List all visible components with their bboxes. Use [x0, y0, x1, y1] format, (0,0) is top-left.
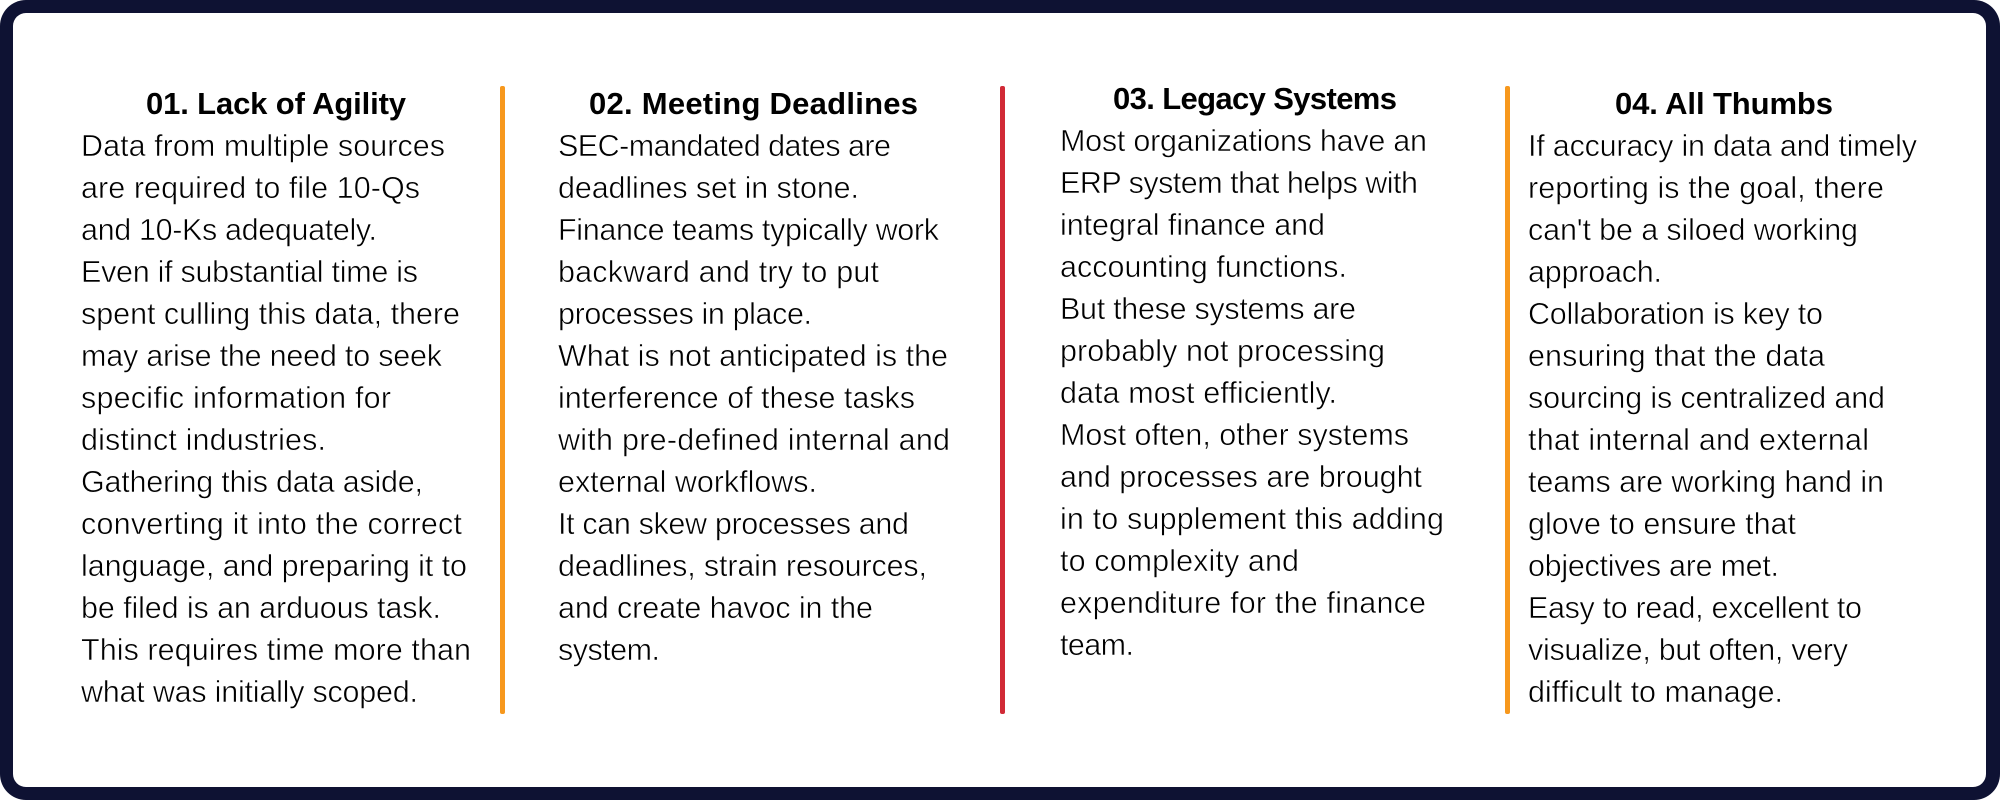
- divider: red: [1000, 86, 1005, 714]
- body text: 04: glove to ensure that: [1528, 507, 1797, 541]
- body text: 03: Most organizations have an: [1060, 124, 1427, 158]
- body text: 01: Gathering this data aside,: [81, 465, 423, 499]
- body text: 04: difficult to manage.: [1528, 675, 1783, 709]
- body text: 03: in to supplement this adding: [1060, 502, 1444, 536]
- body text: 02: deadlines, strain resources,: [558, 549, 927, 583]
- panel: 04 All Thumbs: [1528, 86, 1918, 709]
- body text: 01: be filed is an arduous task.: [81, 591, 441, 625]
- body text: 03: ERP system that helps with: [1060, 166, 1418, 200]
- panel: 01 Lack of Agility: [80, 86, 471, 709]
- body text: 02: system.: [558, 633, 660, 667]
- body text: 04: [1528, 129, 1918, 709]
- heading: 04: 04. All Thumbs: [1615, 86, 1833, 121]
- divider: orange 2: [1505, 86, 1510, 714]
- body text: 01: converting it into the correct: [81, 507, 463, 541]
- body text: 03: expenditure for the finance: [1060, 586, 1426, 620]
- body text: 03: But these systems are: [1060, 292, 1356, 326]
- body text: 04: sourcing is centralized and: [1528, 381, 1885, 415]
- body text: 03: and processes are brought: [1060, 460, 1423, 494]
- body text: 03: probably not processing: [1060, 334, 1385, 368]
- body text: 02: backward and try to put: [558, 255, 880, 289]
- heading: 02: 02. Meeting Deadlines: [589, 86, 918, 121]
- body text: 02: with pre-defined internal and: [557, 423, 950, 457]
- body text: 01: what was initially scoped.: [80, 675, 418, 709]
- heading: 01: 01. Lack of Agility: [146, 86, 407, 121]
- body text: 01: specific information for: [81, 381, 391, 415]
- panel: 02 Meeting Deadlines: [557, 86, 950, 667]
- body text: 04: teams are working hand in: [1528, 465, 1884, 499]
- body text: 01: spent culling this data, there: [81, 297, 460, 331]
- body text: 01: are required to file 10-Qs: [81, 171, 420, 205]
- body text: 04: reporting is the goal, there: [1528, 171, 1884, 205]
- body text: 04: Easy to read, excellent to: [1528, 591, 1862, 625]
- body text: 01: distinct industries.: [81, 423, 326, 457]
- body text: 03: to complexity and: [1060, 544, 1299, 578]
- body text: 04: Collaboration is key to: [1528, 297, 1823, 331]
- body text: 03: team.: [1060, 628, 1134, 662]
- body text: 04: ensuring that the data: [1528, 339, 1825, 373]
- body text: 02: What is not anticipated is the: [558, 339, 948, 373]
- body text: 04: objectives are met.: [1528, 549, 1779, 583]
- body text: 01: Data from multiple sources: [81, 129, 445, 163]
- panel: 03 Legacy Systems: [1060, 81, 1444, 662]
- body text: 03: Most often, other systems: [1060, 418, 1409, 452]
- body text: 01: [80, 129, 471, 709]
- body text: 01: language, and preparing it to: [81, 549, 467, 583]
- body text: 04: If accuracy in data and timely: [1528, 129, 1918, 163]
- body text: 04: visualize, but often, very: [1528, 633, 1849, 667]
- body text: 03: [1060, 124, 1444, 662]
- body text: 02: SEC-mandated dates are: [558, 129, 891, 163]
- body text: 04: approach.: [1528, 255, 1662, 289]
- heading: 03: 03. Legacy Systems: [1113, 81, 1397, 116]
- body text: 03: integral finance and: [1060, 208, 1325, 242]
- body text: 02: processes in place.: [558, 297, 812, 331]
- body text: 01: This requires time more than: [81, 633, 471, 667]
- body text: 04: that internal and external: [1528, 423, 1869, 457]
- body text: 04: can't be a siloed working: [1528, 213, 1858, 247]
- body text: 02: and create havoc in the: [558, 591, 873, 625]
- body text: 01: may arise the need to seek: [81, 339, 443, 373]
- body text: 01: Even if substantial time is: [81, 255, 418, 289]
- body text: 02: deadlines set in stone.: [558, 171, 859, 205]
- body text: 02: interference of these tasks: [558, 381, 915, 415]
- body text: 02: [557, 129, 950, 667]
- body text: 01: and 10-Ks adequately.: [81, 213, 377, 247]
- body text: 02: external workflows.: [558, 465, 817, 499]
- body text: 02: Finance teams typically work: [558, 213, 940, 247]
- body text: 03: accounting functions.: [1060, 250, 1347, 284]
- divider: orange 1: [500, 86, 505, 714]
- body text: 02: It can skew processes and: [558, 507, 909, 541]
- body text: 03: data most efficiently.: [1060, 376, 1337, 410]
